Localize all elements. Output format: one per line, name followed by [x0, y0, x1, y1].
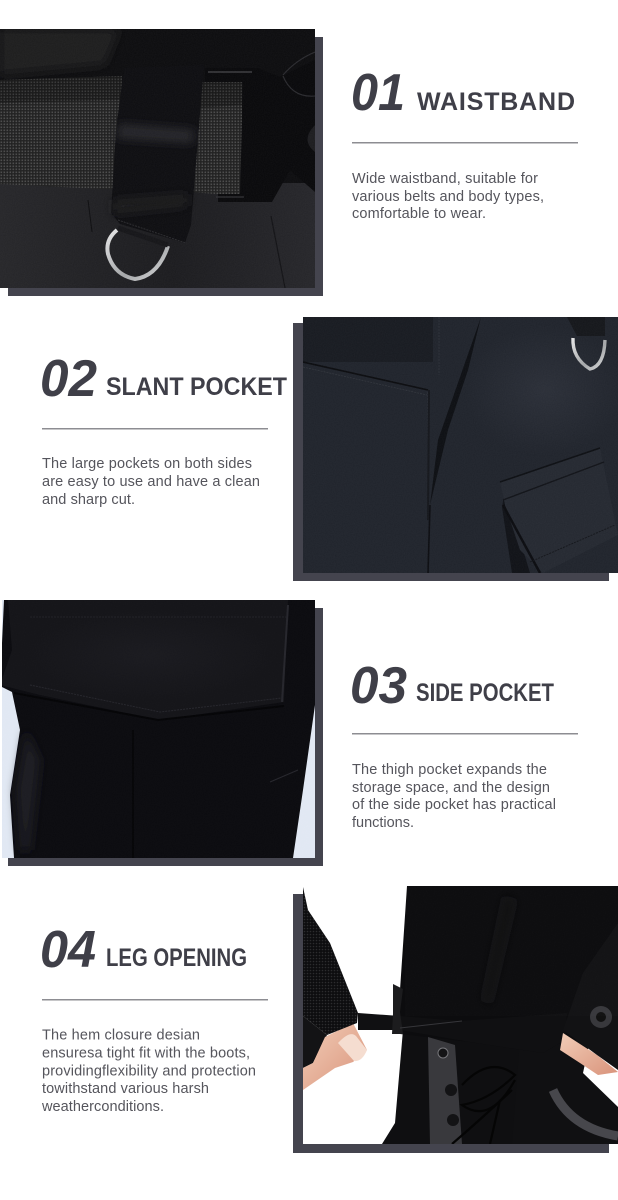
- left glove: [303, 887, 358, 1035]
- heading SLANT POCKET: SLANT POCKET: [106, 373, 287, 401]
- D-ring: [573, 338, 605, 369]
- description: weatherconditions.: [41, 1099, 164, 1115]
- image shadow block: [293, 894, 609, 1153]
- panel: slant pocket: [293, 317, 618, 581]
- description: of the side pocket has practical: [352, 797, 556, 813]
- description: storage space, and the design: [352, 780, 550, 796]
- description: The hem closure desian: [42, 1028, 200, 1044]
- cargo flap: [504, 490, 524, 554]
- description: The large pockets on both sides: [42, 456, 252, 472]
- description: and sharp cut.: [42, 492, 135, 508]
- panel: waistband: [0, 29, 323, 296]
- panel: slant pocket text: [40, 350, 287, 508]
- description: are easy to use and have a clean: [42, 474, 260, 490]
- number 03: 03: [350, 657, 407, 715]
- panel: leg opening text: [40, 921, 268, 1115]
- left hand skin: [303, 1023, 367, 1090]
- fabric grain: [405, 886, 618, 1016]
- D-ring strap: [567, 317, 605, 336]
- description: comfortable to wear.: [352, 206, 486, 222]
- photo: hem closure: [303, 886, 618, 1144]
- divider: [352, 733, 578, 734]
- fabric grain: [303, 317, 618, 573]
- heading LEG OPENING: LEG OPENING: [106, 944, 247, 972]
- description: providingflexibility and protection: [42, 1064, 256, 1080]
- belt loop strap: [111, 82, 203, 242]
- panel: leg opening: [293, 886, 618, 1153]
- divider: [42, 999, 268, 1000]
- front boot: [382, 1030, 520, 1144]
- buckle: [218, 122, 315, 202]
- photo: slant pocket: [303, 317, 618, 573]
- heading SIDE POCKET: SIDE POCKET: [416, 679, 554, 707]
- photo: side pocket: [0, 600, 315, 858]
- heading WAISTBAND: WAISTBAND: [417, 88, 575, 116]
- image shadow block: [8, 37, 323, 296]
- D-ring: [107, 230, 168, 279]
- panel: side pocket text: [350, 657, 578, 831]
- number 02: 02: [40, 350, 97, 408]
- slant opening: [430, 317, 481, 505]
- right hand skin: [560, 1033, 618, 1075]
- description: towithstand various harsh: [42, 1081, 209, 1097]
- back boot: [510, 1040, 618, 1144]
- trouser leg: [400, 886, 618, 1040]
- welt pocket: [303, 362, 428, 390]
- boot leather and laces: [428, 1037, 462, 1144]
- belt webbing: [0, 76, 122, 190]
- fabric grain: [2, 600, 315, 858]
- lower trouser fabric: [0, 183, 315, 288]
- hem strap: [358, 1013, 393, 1030]
- description: The thigh pocket expands the: [352, 762, 547, 778]
- image shadow block: [293, 323, 609, 581]
- description: various belts and body types,: [352, 189, 544, 205]
- panel: side pocket: [0, 600, 323, 866]
- divider: [42, 428, 268, 430]
- pleat: [132, 730, 134, 858]
- glove badge: [590, 1006, 612, 1028]
- fabric grain: [0, 29, 315, 288]
- trouser leg: [0, 600, 315, 858]
- image shadow block: [8, 608, 323, 866]
- right glove: [588, 1040, 618, 1070]
- left lower finger glove: [303, 1016, 327, 1068]
- side gusset: [502, 500, 530, 573]
- number 04: 04: [40, 921, 96, 979]
- photo: belt and buckle: [0, 29, 315, 288]
- description: Wide waistband, suitable for: [352, 171, 538, 187]
- description: functions.: [352, 815, 414, 831]
- cargo flap: [0, 600, 288, 720]
- description: ensuresa tight fit with the boots,: [42, 1046, 250, 1062]
- panel: waistband text: [351, 64, 578, 222]
- number 01: 01: [351, 64, 405, 122]
- divider: [352, 142, 578, 144]
